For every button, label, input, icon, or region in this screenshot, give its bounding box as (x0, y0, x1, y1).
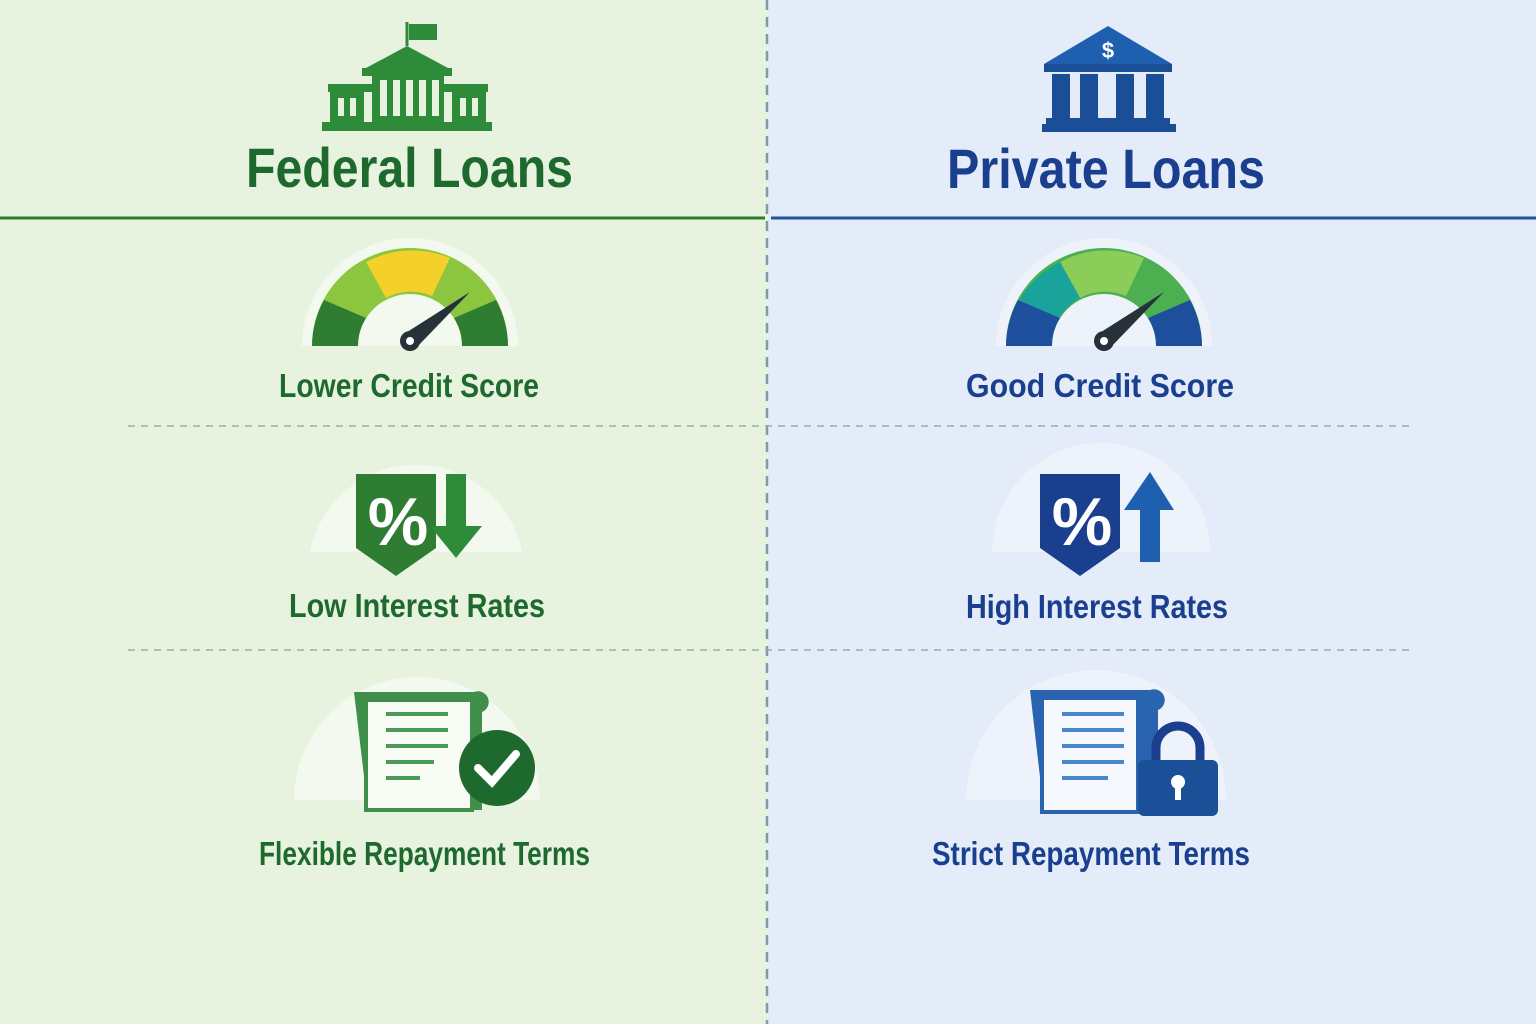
icon: percent down: % (368, 484, 428, 560)
icon: percent up (992, 443, 1210, 576)
label: Strict Repayment Terms: Strict Repayment Terms (932, 835, 1250, 872)
icon: percent down (310, 465, 522, 576)
label: High Interest Rates: High Interest Rates (966, 588, 1228, 625)
background left (0, 0, 768, 1024)
label: Lower Credit Score: Lower Credit Score (279, 367, 539, 404)
icon: private bank: $ (1102, 38, 1114, 63)
title: Federal Loans: Federal Loans (246, 136, 573, 199)
background right (768, 0, 1536, 1024)
label: Low Interest Rates: Low Interest Rates (289, 587, 545, 624)
icon: document check (294, 677, 540, 810)
icon: gauge blue (996, 238, 1212, 351)
title: Private Loans: Private Loans (947, 137, 1265, 200)
label: Flexible Repayment Terms: Flexible Repayment Terms (259, 835, 590, 872)
icon: private bank (1042, 26, 1176, 132)
icon: percent up: % (1052, 484, 1112, 560)
icon: federal building (322, 22, 492, 131)
label: Good Credit Score: Good Credit Score (966, 367, 1234, 404)
icon: gauge green (302, 238, 518, 351)
icon: document lock (966, 670, 1226, 816)
